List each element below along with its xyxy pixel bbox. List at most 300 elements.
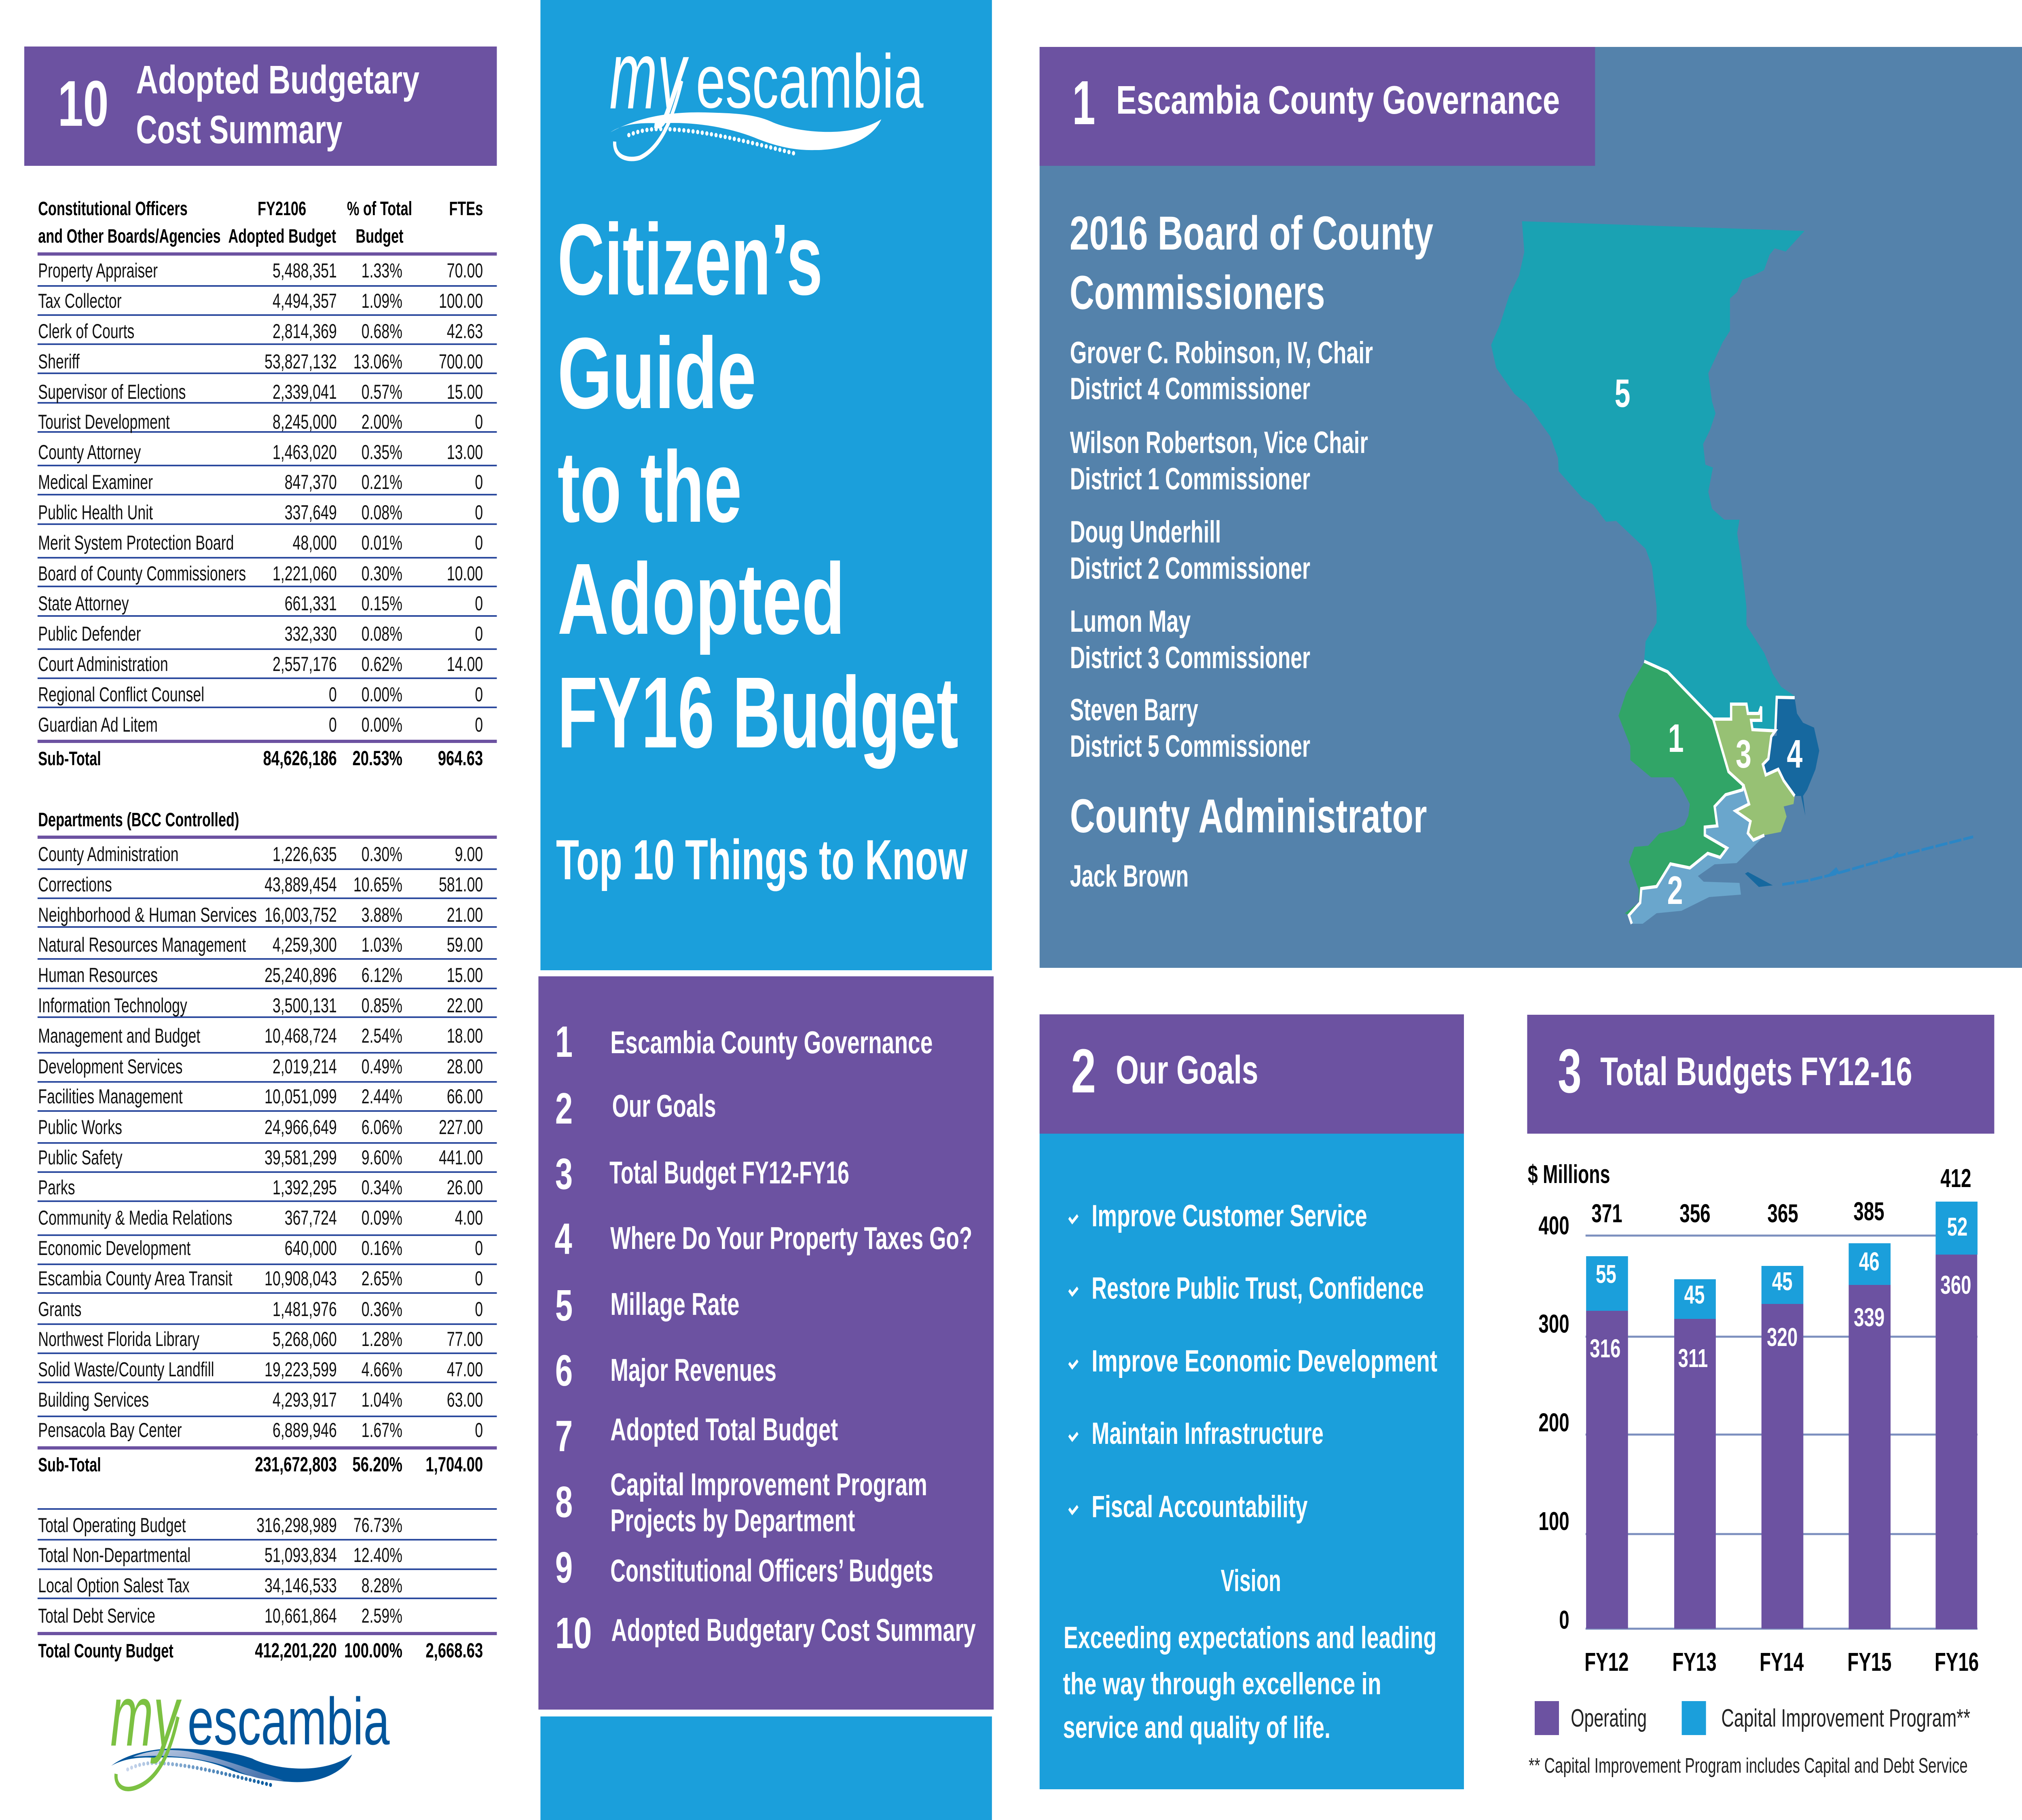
- table: constitutional officers: Supervisor of Elections: [38, 381, 186, 404]
- table: departments: 24,966,649: [264, 1116, 337, 1139]
- district 4: [1763, 697, 1819, 816]
- table: departments: 15.00: [447, 964, 483, 987]
- bar FY14: 320: [1767, 1323, 1798, 1352]
- table: departments: 66.00: [447, 1086, 483, 1108]
- list item 3: [555, 1149, 849, 1199]
- table: departments: Grants: [38, 1298, 81, 1321]
- table: constitutional officers: 0.68%: [362, 320, 402, 343]
- text: board of county commissioners: District 4 Commissioner: [1070, 371, 1310, 406]
- table: departments: Departments (BCC Controlled): [38, 808, 239, 830]
- table: constitutional officers: 42.63: [447, 320, 483, 343]
- table: departments: 1,481,976: [273, 1298, 337, 1321]
- table: departments: 2.65%: [362, 1268, 402, 1290]
- bar FY15: 385: [1853, 1197, 1885, 1226]
- text: board of county commissioners: District 3 Commissioner: [1070, 640, 1310, 675]
- table: county totals: [38, 1509, 497, 1662]
- table: departments: 10.65%: [353, 874, 402, 896]
- list item 6: 6: [555, 1346, 573, 1395]
- table: departments: Pensacola Bay Center: [38, 1419, 182, 1442]
- table: constitutional officers: 0: [475, 623, 483, 645]
- table: constitutional officers: Medical Examiner: [38, 471, 153, 494]
- table: departments: [38, 808, 497, 1476]
- vision statement: service and quality of life.: [1063, 1710, 1330, 1744]
- table: constitutional officers: Sub-Total: [38, 747, 101, 769]
- table: departments: Building Services: [38, 1389, 149, 1412]
- bar FY15: FY15: [1847, 1647, 1891, 1676]
- table: constitutional officers: 0.01%: [362, 532, 402, 554]
- panel: blue footer block: [540, 1716, 992, 1820]
- table: departments: 227.00: [439, 1116, 483, 1139]
- bar FY14: 365: [1767, 1199, 1798, 1228]
- logo: my escambia white: escambia: [696, 39, 924, 124]
- table: departments: 2.44%: [362, 1086, 402, 1108]
- district 3: 3: [1736, 732, 1751, 777]
- table: departments: 9.60%: [362, 1147, 402, 1169]
- goals checklist: Improve Economic Development: [1091, 1344, 1437, 1378]
- table: constitutional officers: 0: [475, 714, 483, 736]
- panel: total budgets: [1527, 1015, 1994, 1778]
- bar FY14: FY14: [1760, 1647, 1804, 1676]
- table: departments: 0: [475, 1298, 483, 1321]
- table: constitutional officers: 10.00: [447, 563, 483, 585]
- table: county totals: 2.59%: [362, 1605, 402, 1627]
- table: constitutional officers: County Attorney: [38, 441, 141, 464]
- table: constitutional officers: 0: [475, 532, 483, 554]
- stacked bar chart: [1528, 1160, 1979, 1676]
- table: departments: 19,223,599: [264, 1359, 337, 1381]
- table: county totals: 10,661,864: [264, 1605, 337, 1627]
- table: departments: 77.00: [447, 1328, 483, 1351]
- table: constitutional officers: 0: [329, 684, 337, 706]
- text: county administrator: Jack Brown: [1070, 859, 1189, 893]
- table: constitutional officers: 1.33%: [362, 260, 402, 282]
- table: departments: 22.00: [447, 995, 483, 1017]
- table: constitutional officers: 15.00: [447, 381, 483, 404]
- table: departments: Public Works: [38, 1116, 122, 1139]
- table: departments: 1.28%: [362, 1328, 402, 1351]
- list item 8: Projects by Department: [610, 1503, 855, 1538]
- table: county totals: 100.00%: [344, 1639, 402, 1662]
- table: county totals: Total County Budget: [38, 1640, 173, 1661]
- table: departments: Solid Waste/County Landfill: [38, 1359, 214, 1381]
- table: constitutional officers: 13.06%: [353, 351, 402, 373]
- heading: section 2: [1040, 1014, 1464, 1134]
- table: constitutional officers: 13.00: [447, 441, 483, 464]
- table: constitutional officers: Court Administration: [38, 653, 168, 676]
- table: departments: 0.36%: [362, 1298, 402, 1321]
- list item 2: 2: [555, 1084, 573, 1133]
- table: constitutional officers: 0.62%: [362, 653, 402, 676]
- text: board of county commissioners: Doug Underhill: [1070, 514, 1221, 549]
- table: departments: Management and Budget: [38, 1025, 200, 1048]
- table: departments: Escambia County Area Transit: [38, 1268, 233, 1290]
- table: constitutional officers: 1,463,020: [273, 441, 337, 464]
- list item 3: Total Budget FY12-FY16: [609, 1155, 849, 1190]
- district 2: 2: [1667, 869, 1683, 913]
- district 1: 1: [1668, 717, 1684, 761]
- text: board of county commissioners: Wilson Robertson, Vice Chair: [1070, 425, 1368, 459]
- vision statement: the way through excellence in: [1063, 1666, 1381, 1701]
- text: county administrator: County Administrator: [1070, 789, 1427, 842]
- table: county totals: Total Non-Departmental: [38, 1544, 190, 1567]
- logo: my escambia white: [609, 21, 924, 159]
- stacked bar chart: $ Millions: [1528, 1160, 1610, 1189]
- table: departments: 4,293,917: [273, 1389, 337, 1412]
- list item 6: [555, 1346, 776, 1395]
- table: county totals: 316,298,989: [256, 1514, 337, 1537]
- goals checklist: Improve Customer Service: [1091, 1198, 1367, 1233]
- title: Citizen’s: [558, 203, 823, 316]
- goals checklist: Fiscal Accountability: [1091, 1489, 1308, 1524]
- text: board of county commissioners: Lumon May: [1070, 604, 1191, 638]
- table: departments: 6,889,946: [273, 1419, 337, 1442]
- table: departments: 4.00: [455, 1207, 483, 1230]
- table: constitutional officers: FTEs: [449, 197, 483, 219]
- bar FY12: 371: [1591, 1199, 1622, 1228]
- table: constitutional officers: 0.00%: [362, 684, 402, 706]
- table: departments: 43,889,454: [264, 874, 337, 896]
- table: departments: 10,468,724: [264, 1025, 337, 1048]
- bar FY13: [1672, 1199, 1717, 1676]
- table: county totals: Total Operating Budget: [38, 1514, 186, 1537]
- stacked bar chart: 300: [1538, 1309, 1569, 1338]
- table: constitutional officers: 0: [475, 684, 483, 706]
- vision statement: Vision: [1221, 1563, 1281, 1598]
- table: constitutional officers: Budget: [356, 225, 404, 247]
- heading: section 10: Adopted Budgetary: [136, 58, 419, 102]
- table: constitutional officers: Sheriff: [38, 351, 80, 373]
- table: departments: 4.66%: [362, 1359, 402, 1381]
- table: departments: 2,019,214: [273, 1056, 337, 1078]
- table: departments: 1.67%: [362, 1419, 402, 1442]
- panel: our goals: [1040, 1014, 1464, 1789]
- subtitle: Top 10 Things to Know: [556, 828, 967, 891]
- table: county totals: 2,668.63: [426, 1639, 483, 1662]
- table: county totals: 8.28%: [362, 1575, 402, 1597]
- table: county totals: 34,146,533: [264, 1575, 337, 1597]
- panel: adopted budgetary cost summary: [24, 47, 497, 1789]
- table: constitutional officers: % of Total: [347, 197, 412, 219]
- table: departments: Northwest Florida Library: [38, 1328, 199, 1351]
- vision statement: Exceeding expectations and leading: [1064, 1620, 1436, 1655]
- table: departments: 1,392,295: [273, 1177, 337, 1199]
- table: constitutional officers: Board of County Commissioners: [38, 563, 246, 585]
- bar FY16: 412: [1940, 1164, 1971, 1193]
- table: departments: 0.85%: [362, 995, 402, 1017]
- text: board of county commissioners: Steven Barry: [1070, 692, 1198, 727]
- table: departments: 0: [475, 1268, 483, 1290]
- district 2: [1629, 785, 1764, 924]
- table: departments: 10,908,043: [264, 1268, 337, 1290]
- text: board of county commissioners: 2016 Board of County: [1070, 206, 1433, 260]
- stacked bar chart: 400: [1538, 1211, 1569, 1240]
- goals checklist: Restore Public Trust, Confidence: [1091, 1271, 1424, 1305]
- table: departments: 28.00: [447, 1056, 483, 1078]
- table: departments: 1.04%: [362, 1389, 402, 1412]
- table: constitutional officers: Merit System Protection Board: [38, 532, 234, 554]
- heading: section 1: [1040, 47, 1595, 166]
- stacked bar chart: 100: [1538, 1507, 1569, 1536]
- table: constitutional officers: 0: [475, 471, 483, 494]
- heading: section 1: Escambia County Governance: [1116, 78, 1560, 123]
- map: commission districts: [1491, 221, 1973, 924]
- table: constitutional officers: 2.00%: [362, 411, 402, 434]
- table: constitutional officers: 337,649: [285, 502, 337, 524]
- heading: section 2: Our Goals: [1116, 1048, 1258, 1092]
- table: departments: Development Services: [38, 1056, 183, 1078]
- district 5: [1491, 221, 1804, 731]
- table: departments: Facilities Management: [38, 1086, 183, 1108]
- bar FY16: [1935, 1164, 1979, 1676]
- table: constitutional officers: Tourist Development: [38, 411, 170, 434]
- table: constitutional officers: 0: [475, 502, 483, 524]
- bar FY13: 356: [1679, 1199, 1711, 1228]
- heading: section 10: 10: [58, 68, 109, 140]
- table: constitutional officers: 964.63: [438, 747, 483, 770]
- bar FY16: 52: [1947, 1212, 1967, 1241]
- list item 1: [555, 1017, 933, 1067]
- list item 7: [555, 1412, 838, 1461]
- bar FY12: FY12: [1584, 1647, 1629, 1676]
- list item 1: 1: [555, 1017, 573, 1067]
- list item 10: [555, 1608, 976, 1658]
- table: constitutional officers: 84,626,186: [263, 747, 337, 770]
- table: departments: 6.06%: [362, 1116, 402, 1139]
- table: county totals: Local Option Salest Tax: [38, 1575, 190, 1597]
- list item 7: Adopted Total Budget: [610, 1412, 838, 1447]
- table: constitutional officers: Tax Collector: [38, 290, 122, 313]
- footnote: ** Capital Improvement Program includes Capital and Debt Service: [1529, 1754, 1968, 1778]
- table: departments: 0.09%: [362, 1207, 402, 1230]
- heading: section 3: [1527, 1015, 1994, 1134]
- goals checklist: [1069, 1198, 1437, 1524]
- table: constitutional officers: 4,494,357: [273, 290, 337, 313]
- bar FY14: 45: [1772, 1267, 1793, 1296]
- table: constitutional officers: 5,488,351: [273, 260, 337, 282]
- table: departments: 56.20%: [352, 1453, 402, 1476]
- table: departments: Natural Resources Management: [38, 934, 246, 957]
- table: constitutional officers: 847,370: [285, 471, 337, 494]
- chart legend: Operating: [1571, 1704, 1647, 1732]
- table: departments: 6.12%: [362, 964, 402, 987]
- list item 9: [555, 1543, 933, 1592]
- table: departments: 3.88%: [362, 904, 402, 927]
- list item 6: Major Revenues: [610, 1353, 776, 1388]
- table: departments: Economic Development: [38, 1237, 190, 1260]
- table: departments: 1,226,635: [273, 843, 337, 866]
- table: departments: 39,581,299: [264, 1147, 337, 1169]
- table: constitutional officers: Regional Conflict Counsel: [38, 684, 204, 706]
- table: constitutional officers: Property Appraiser: [38, 260, 158, 282]
- table: departments: 1,704.00: [426, 1453, 483, 1476]
- heading: section 10: Cost Summary: [136, 108, 342, 152]
- list item 10: 10: [555, 1608, 592, 1658]
- bar FY13: 311: [1678, 1344, 1708, 1373]
- table: departments: 0: [475, 1237, 483, 1260]
- table: constitutional officers: 661,331: [285, 593, 337, 615]
- table: departments: Human Resources: [38, 964, 158, 987]
- list item 9: Constitutional Officers’ Budgets: [610, 1553, 933, 1588]
- table: constitutional officers: 0.08%: [362, 623, 402, 645]
- table: constitutional officers: 700.00: [439, 351, 483, 373]
- heading: section 3: 3: [1558, 1037, 1582, 1106]
- table: departments: Neighborhood & Human Services: [38, 904, 257, 927]
- table: constitutional officers: Clerk of Courts: [38, 320, 134, 343]
- panel: escambia county governance: [1040, 47, 2022, 968]
- table: departments: 231,672,803: [255, 1453, 337, 1476]
- table: constitutional officers: 8,245,000: [273, 411, 337, 434]
- bar FY16: 360: [1940, 1270, 1971, 1299]
- table: departments: 0.16%: [362, 1237, 402, 1260]
- table: departments: 63.00: [447, 1389, 483, 1412]
- list item 8: Capital Improvement Program: [610, 1467, 927, 1502]
- table: constitutional officers: State Attorney: [38, 593, 129, 615]
- table: departments: 59.00: [447, 934, 483, 957]
- table: constitutional officers: FY2106: [258, 197, 306, 219]
- title: to the: [558, 430, 742, 544]
- list item 8: [555, 1467, 927, 1538]
- table: departments: 4,259,300: [273, 934, 337, 957]
- list item 4: Where Do Your Property Taxes Go?: [610, 1221, 972, 1256]
- table: constitutional officers: 0.30%: [362, 563, 402, 585]
- logo: my escambia white: my: [609, 21, 689, 129]
- list item 9: 9: [555, 1543, 573, 1592]
- list item 7: 7: [555, 1412, 573, 1461]
- text: board of county commissioners: Commissioners: [1070, 266, 1325, 319]
- table: constitutional officers: 70.00: [447, 260, 483, 282]
- text: board of county commissioners: [1070, 206, 1433, 763]
- heading: section 3: Total Budgets FY12-16: [1600, 1050, 1912, 1094]
- table: county totals: 412,201,220: [255, 1639, 337, 1662]
- panel: cover: [540, 0, 992, 970]
- table: departments: 2.54%: [362, 1025, 402, 1048]
- list item 4: [554, 1214, 972, 1263]
- logo: my escambia colour: escambia: [188, 1685, 390, 1759]
- table: constitutional officers: 0.21%: [362, 471, 402, 494]
- table: departments: 640,000: [285, 1237, 337, 1260]
- table: county totals: 12.40%: [353, 1544, 402, 1567]
- table: constitutional officers: [38, 197, 497, 770]
- text: board of county commissioners: Grover C. Robinson, IV, Chair: [1070, 335, 1373, 370]
- table: departments: Community & Media Relations: [38, 1207, 233, 1230]
- table: departments: 18.00: [447, 1025, 483, 1048]
- bar FY13: 45: [1684, 1280, 1705, 1309]
- table: departments: 10,051,099: [264, 1086, 337, 1108]
- table: constitutional officers: 1.09%: [362, 290, 402, 313]
- title: [558, 203, 958, 769]
- table: departments: 581.00: [439, 874, 483, 896]
- table: constitutional officers: 0: [329, 714, 337, 736]
- bar FY12: 316: [1590, 1334, 1620, 1363]
- table: constitutional officers: Adopted Budget: [228, 225, 336, 247]
- table: constitutional officers: Public Defender: [38, 623, 141, 645]
- table: county totals: Total Debt Service: [38, 1605, 155, 1627]
- stacked bar chart: 200: [1538, 1408, 1569, 1437]
- text: board of county commissioners: District 1 Commissioner: [1070, 461, 1310, 496]
- table: departments: Corrections: [38, 874, 112, 896]
- barrier island: [1745, 837, 1973, 887]
- table: constitutional officers: 53,827,132: [264, 351, 337, 373]
- table: constitutional officers: and Other Boards/Agencies: [38, 225, 221, 247]
- table: county totals: 76.73%: [353, 1514, 402, 1537]
- bar FY15: 46: [1859, 1247, 1880, 1276]
- heading: section 10: [24, 47, 497, 166]
- list item 2: [555, 1084, 716, 1133]
- heading: section 2: 2: [1071, 1037, 1096, 1106]
- title: Adopted: [558, 542, 845, 656]
- list item 1: Escambia County Governance: [610, 1025, 933, 1060]
- table: constitutional officers: 0: [475, 593, 483, 615]
- table: departments: 25,240,896: [264, 964, 337, 987]
- table: constitutional officers: 0.00%: [362, 714, 402, 736]
- list item 4: 4: [554, 1214, 572, 1263]
- table: departments: Sub-Total: [38, 1454, 101, 1475]
- table: constitutional officers: 332,330: [285, 623, 337, 645]
- table: departments: Parks: [38, 1177, 75, 1199]
- table: constitutional officers: 100.00: [439, 290, 483, 313]
- table: constitutional officers: 0.35%: [362, 441, 402, 464]
- list item 10: Adopted Budgetary Cost Summary: [611, 1613, 976, 1648]
- district 5: 5: [1615, 372, 1631, 416]
- bar FY15: 339: [1854, 1303, 1885, 1332]
- stacked bar chart: 0: [1559, 1605, 1569, 1634]
- table: departments: Public Safety: [38, 1147, 123, 1169]
- bar FY12: [1584, 1199, 1629, 1676]
- table: constitutional officers: 48,000: [293, 532, 337, 554]
- table: departments: 441.00: [439, 1147, 483, 1169]
- table: constitutional officers: Public Health Unit: [38, 502, 153, 524]
- list item 2: Our Goals: [612, 1089, 716, 1124]
- table: constitutional officers: 0.57%: [362, 381, 402, 404]
- table: departments: 0.49%: [362, 1056, 402, 1078]
- table: constitutional officers: 0: [475, 411, 483, 434]
- list item 3: 3: [555, 1149, 573, 1199]
- table: departments: 0.30%: [362, 843, 402, 866]
- table: departments: 21.00: [447, 904, 483, 927]
- table: constitutional officers: Constitutional Officers: [38, 197, 188, 219]
- table: departments: 0.34%: [362, 1177, 402, 1199]
- table: constitutional officers: 2,557,176: [273, 653, 337, 676]
- title: Guide: [558, 317, 756, 430]
- bar FY16: FY16: [1935, 1647, 1979, 1676]
- table: departments: 0: [475, 1419, 483, 1442]
- list item 5: [555, 1281, 740, 1330]
- table: constitutional officers: Guardian Ad Litem: [38, 714, 158, 736]
- list item 8: 8: [555, 1477, 573, 1527]
- table: constitutional officers: 2,339,041: [273, 381, 337, 404]
- chart legend: [1535, 1701, 1970, 1735]
- district 4: 4: [1787, 732, 1802, 777]
- text: board of county commissioners: District 5 Commissioner: [1070, 729, 1310, 763]
- text: board of county commissioners: District 2 Commissioner: [1070, 551, 1310, 585]
- bar FY12: 55: [1596, 1259, 1616, 1289]
- table: constitutional officers: 0.08%: [362, 502, 402, 524]
- logo: my escambia colour: [110, 1667, 390, 1789]
- table: county totals: 51,093,834: [264, 1544, 337, 1567]
- bar FY14: [1760, 1199, 1804, 1676]
- heading: section 1: 1: [1072, 68, 1096, 138]
- bar FY13: FY13: [1672, 1647, 1717, 1676]
- table: departments: 3,500,131: [273, 995, 337, 1017]
- table: constitutional officers: 0.15%: [362, 593, 402, 615]
- table: constitutional officers: 20.53%: [352, 747, 402, 770]
- text: county administrator: [1070, 789, 1427, 893]
- table: constitutional officers: 14.00: [447, 653, 483, 676]
- title: FY16 Budget: [558, 656, 958, 769]
- goals checklist: Maintain Infrastructure: [1091, 1416, 1324, 1450]
- table: departments: 5,268,060: [273, 1328, 337, 1351]
- list item 5: Millage Rate: [610, 1287, 740, 1322]
